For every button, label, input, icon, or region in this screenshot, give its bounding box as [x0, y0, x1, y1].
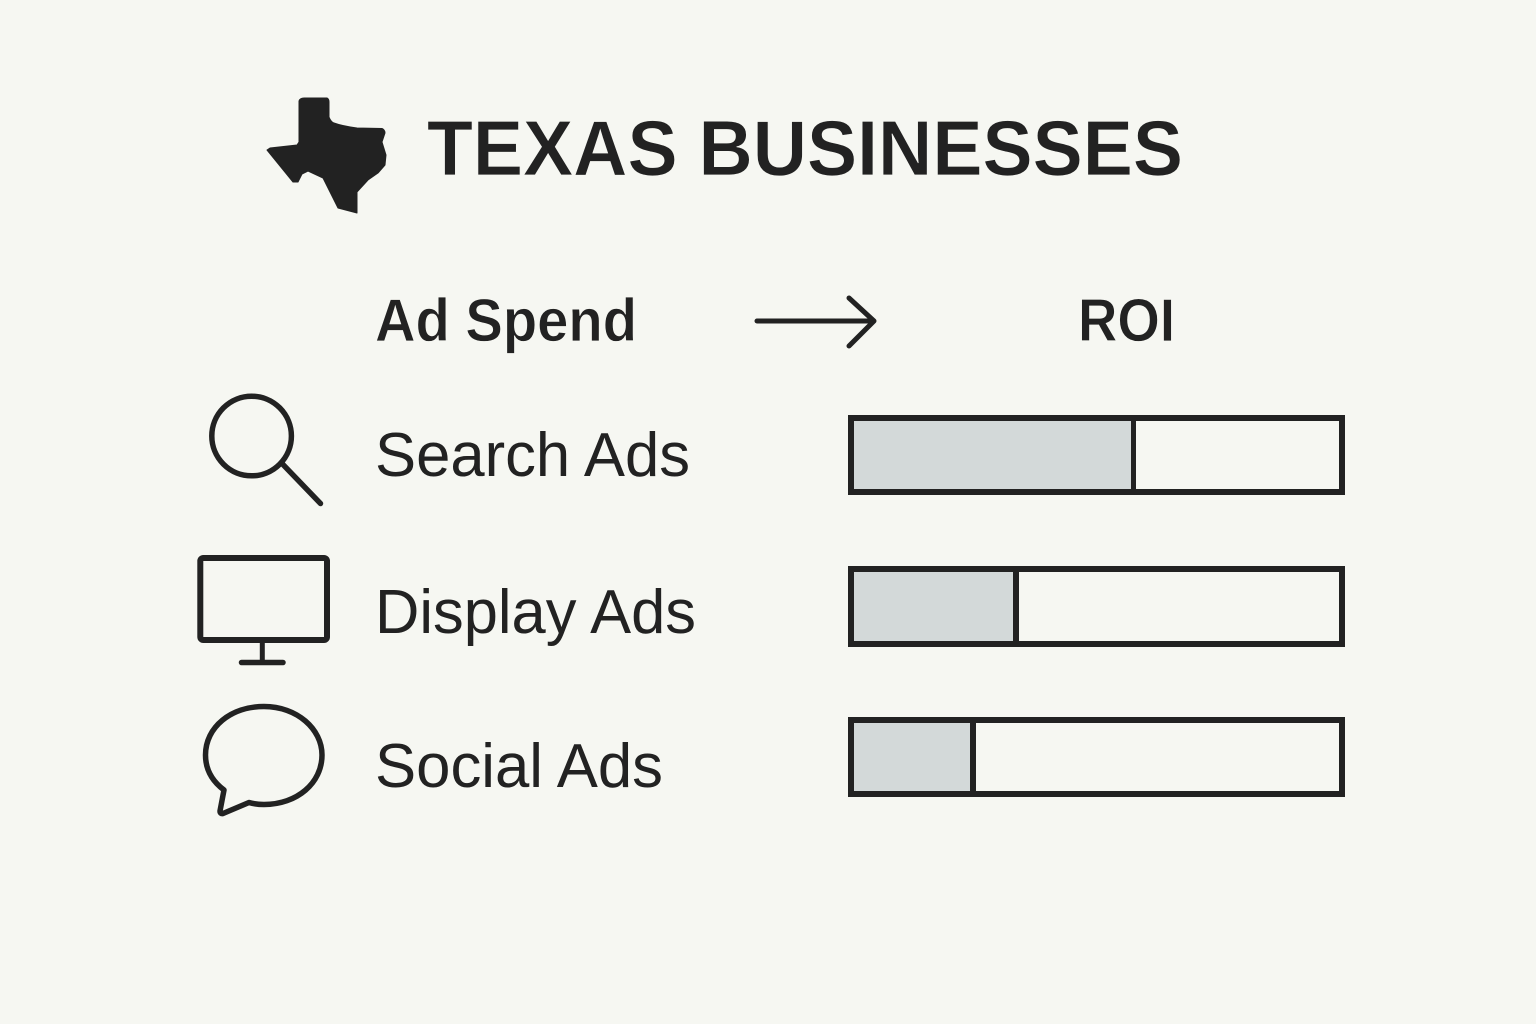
icon: Texas silhouette	[267, 98, 386, 213]
row: Display Ads	[200, 558, 1342, 662]
bar: Display Ads ROI	[851, 569, 1342, 644]
heading: Ad Spend: Ad Spend	[375, 287, 637, 354]
icon: magnifying glass	[212, 396, 320, 504]
row: Social Ads	[206, 706, 1342, 814]
row: Search Ads	[212, 396, 1342, 504]
bar: Social Ads ROI	[851, 720, 1342, 794]
header: Texas Businesses	[267, 98, 1183, 213]
arrow	[757, 298, 874, 346]
bar: Search Ads ROI	[851, 418, 1342, 492]
heading: ROI: ROI	[1078, 287, 1175, 354]
label: Search Ads: Search Ads	[375, 421, 690, 490]
icon: desktop monitor	[200, 558, 327, 662]
column headers	[375, 287, 1175, 354]
label: Display Ads: Display Ads	[375, 578, 696, 647]
label: Social Ads: Social Ads	[375, 732, 663, 801]
icon: speech bubble	[206, 706, 322, 814]
title: TEXAS BUSINESSES	[427, 104, 1183, 192]
